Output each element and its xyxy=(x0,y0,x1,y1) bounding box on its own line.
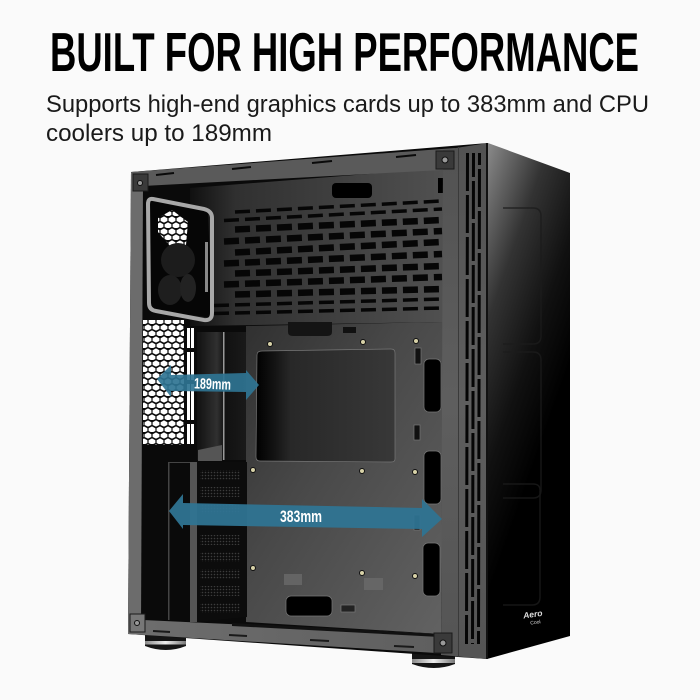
motherboard tray xyxy=(246,322,443,634)
side panel logo xyxy=(521,608,544,628)
arrow: 189mm CPU cooler clearance: 189mm xyxy=(194,375,231,394)
computer case xyxy=(128,143,570,668)
standoff screws xyxy=(250,338,418,578)
subtitle text: coolers up to 189mm xyxy=(46,120,272,147)
arrow: 189mm CPU cooler clearance xyxy=(157,365,259,400)
corner brackets xyxy=(130,151,454,653)
bottom frame bar xyxy=(128,620,453,654)
arrow: 383mm graphics card clearance: 383mm xyxy=(280,507,322,526)
top notch xyxy=(288,322,332,336)
CPU cutout xyxy=(256,349,395,462)
front right frame xyxy=(441,143,488,659)
rear slot vents xyxy=(187,328,194,444)
top cable hole xyxy=(332,183,372,198)
side panel xyxy=(487,143,570,659)
side panel logo: Aero xyxy=(521,608,543,621)
expansion slots xyxy=(168,462,247,622)
left frame xyxy=(128,172,143,634)
top frame bar xyxy=(131,148,455,186)
subtitle text: Supports high-end graphics cards up to 383mm and CPU xyxy=(46,91,649,118)
cable routing holes xyxy=(286,348,441,616)
rear cooler bay panel xyxy=(197,332,247,461)
side panel logo: Cool xyxy=(530,619,541,627)
rear fan with frame xyxy=(148,199,212,320)
case feet xyxy=(145,634,455,668)
rear mesh plate xyxy=(190,168,444,326)
arrow: 383mm graphics card clearance xyxy=(169,494,442,537)
honeycomb vent xyxy=(143,320,184,445)
subtitle text xyxy=(46,91,649,147)
interior base xyxy=(128,143,488,659)
